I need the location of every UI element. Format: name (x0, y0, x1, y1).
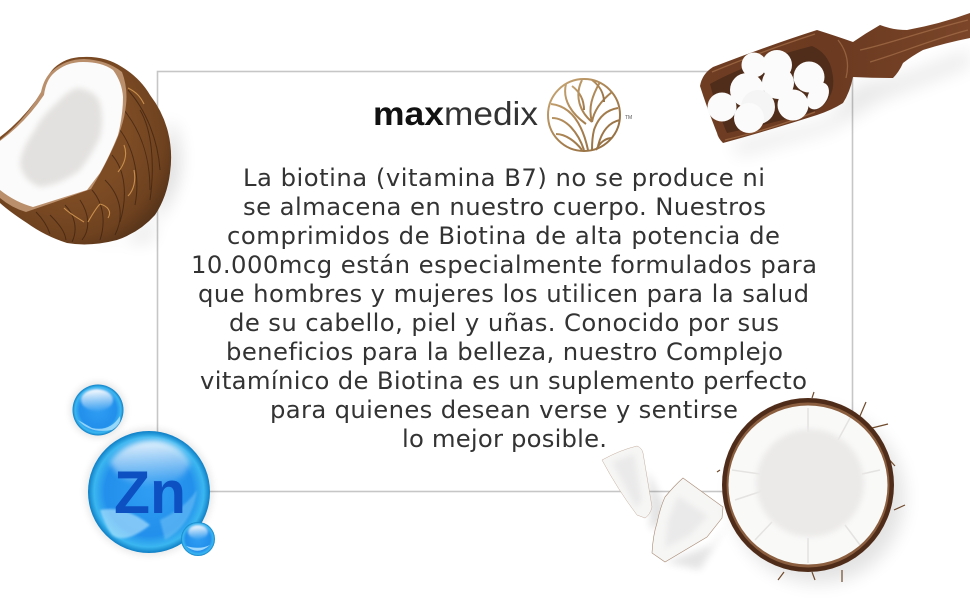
body text: vitamínico de Biotina es un suplemento perfecto (200, 366, 807, 395)
image: coconut pieces (602, 446, 730, 570)
panel: text frame (158, 72, 852, 492)
tablets (708, 50, 833, 133)
image: wooden scoop with white tablets (700, 13, 970, 155)
image: halved coconut top left (0, 57, 179, 244)
body text: se almacena en nuestro cuerpo. Nuestros (243, 192, 766, 221)
image: halved coconut bottom right (717, 392, 905, 583)
body text: que hombres y mujeres los utilicen para la salud (198, 279, 809, 308)
logo: maxmedix: max (373, 95, 445, 132)
icon: small blue bubble (71, 383, 125, 437)
body text: lo mejor posible. (402, 424, 607, 453)
icon: large zinc bubble: Zn (114, 459, 186, 526)
body text: 10.000mcg están especialmente formulados para (191, 250, 817, 279)
body text: beneficios para la belleza, nuestro Complejo (226, 337, 783, 366)
body text: La biotina (vitamina B7) no se produce ni (243, 163, 765, 192)
icon: tiny blue bubble (181, 522, 215, 556)
logo: maxmedix (373, 79, 632, 151)
body text (191, 163, 817, 453)
body text: de su cabello, piel y uñas. Conocido por sus (229, 308, 779, 337)
logo: maxmedix: TM (625, 115, 632, 121)
body text: para quienes desean verse y sentirse (270, 395, 738, 424)
icon: large zinc bubble (86, 429, 212, 555)
body text: comprimidos de Biotina de alta potencia de (227, 221, 780, 250)
logo: maxmedix: medix (444, 95, 539, 132)
